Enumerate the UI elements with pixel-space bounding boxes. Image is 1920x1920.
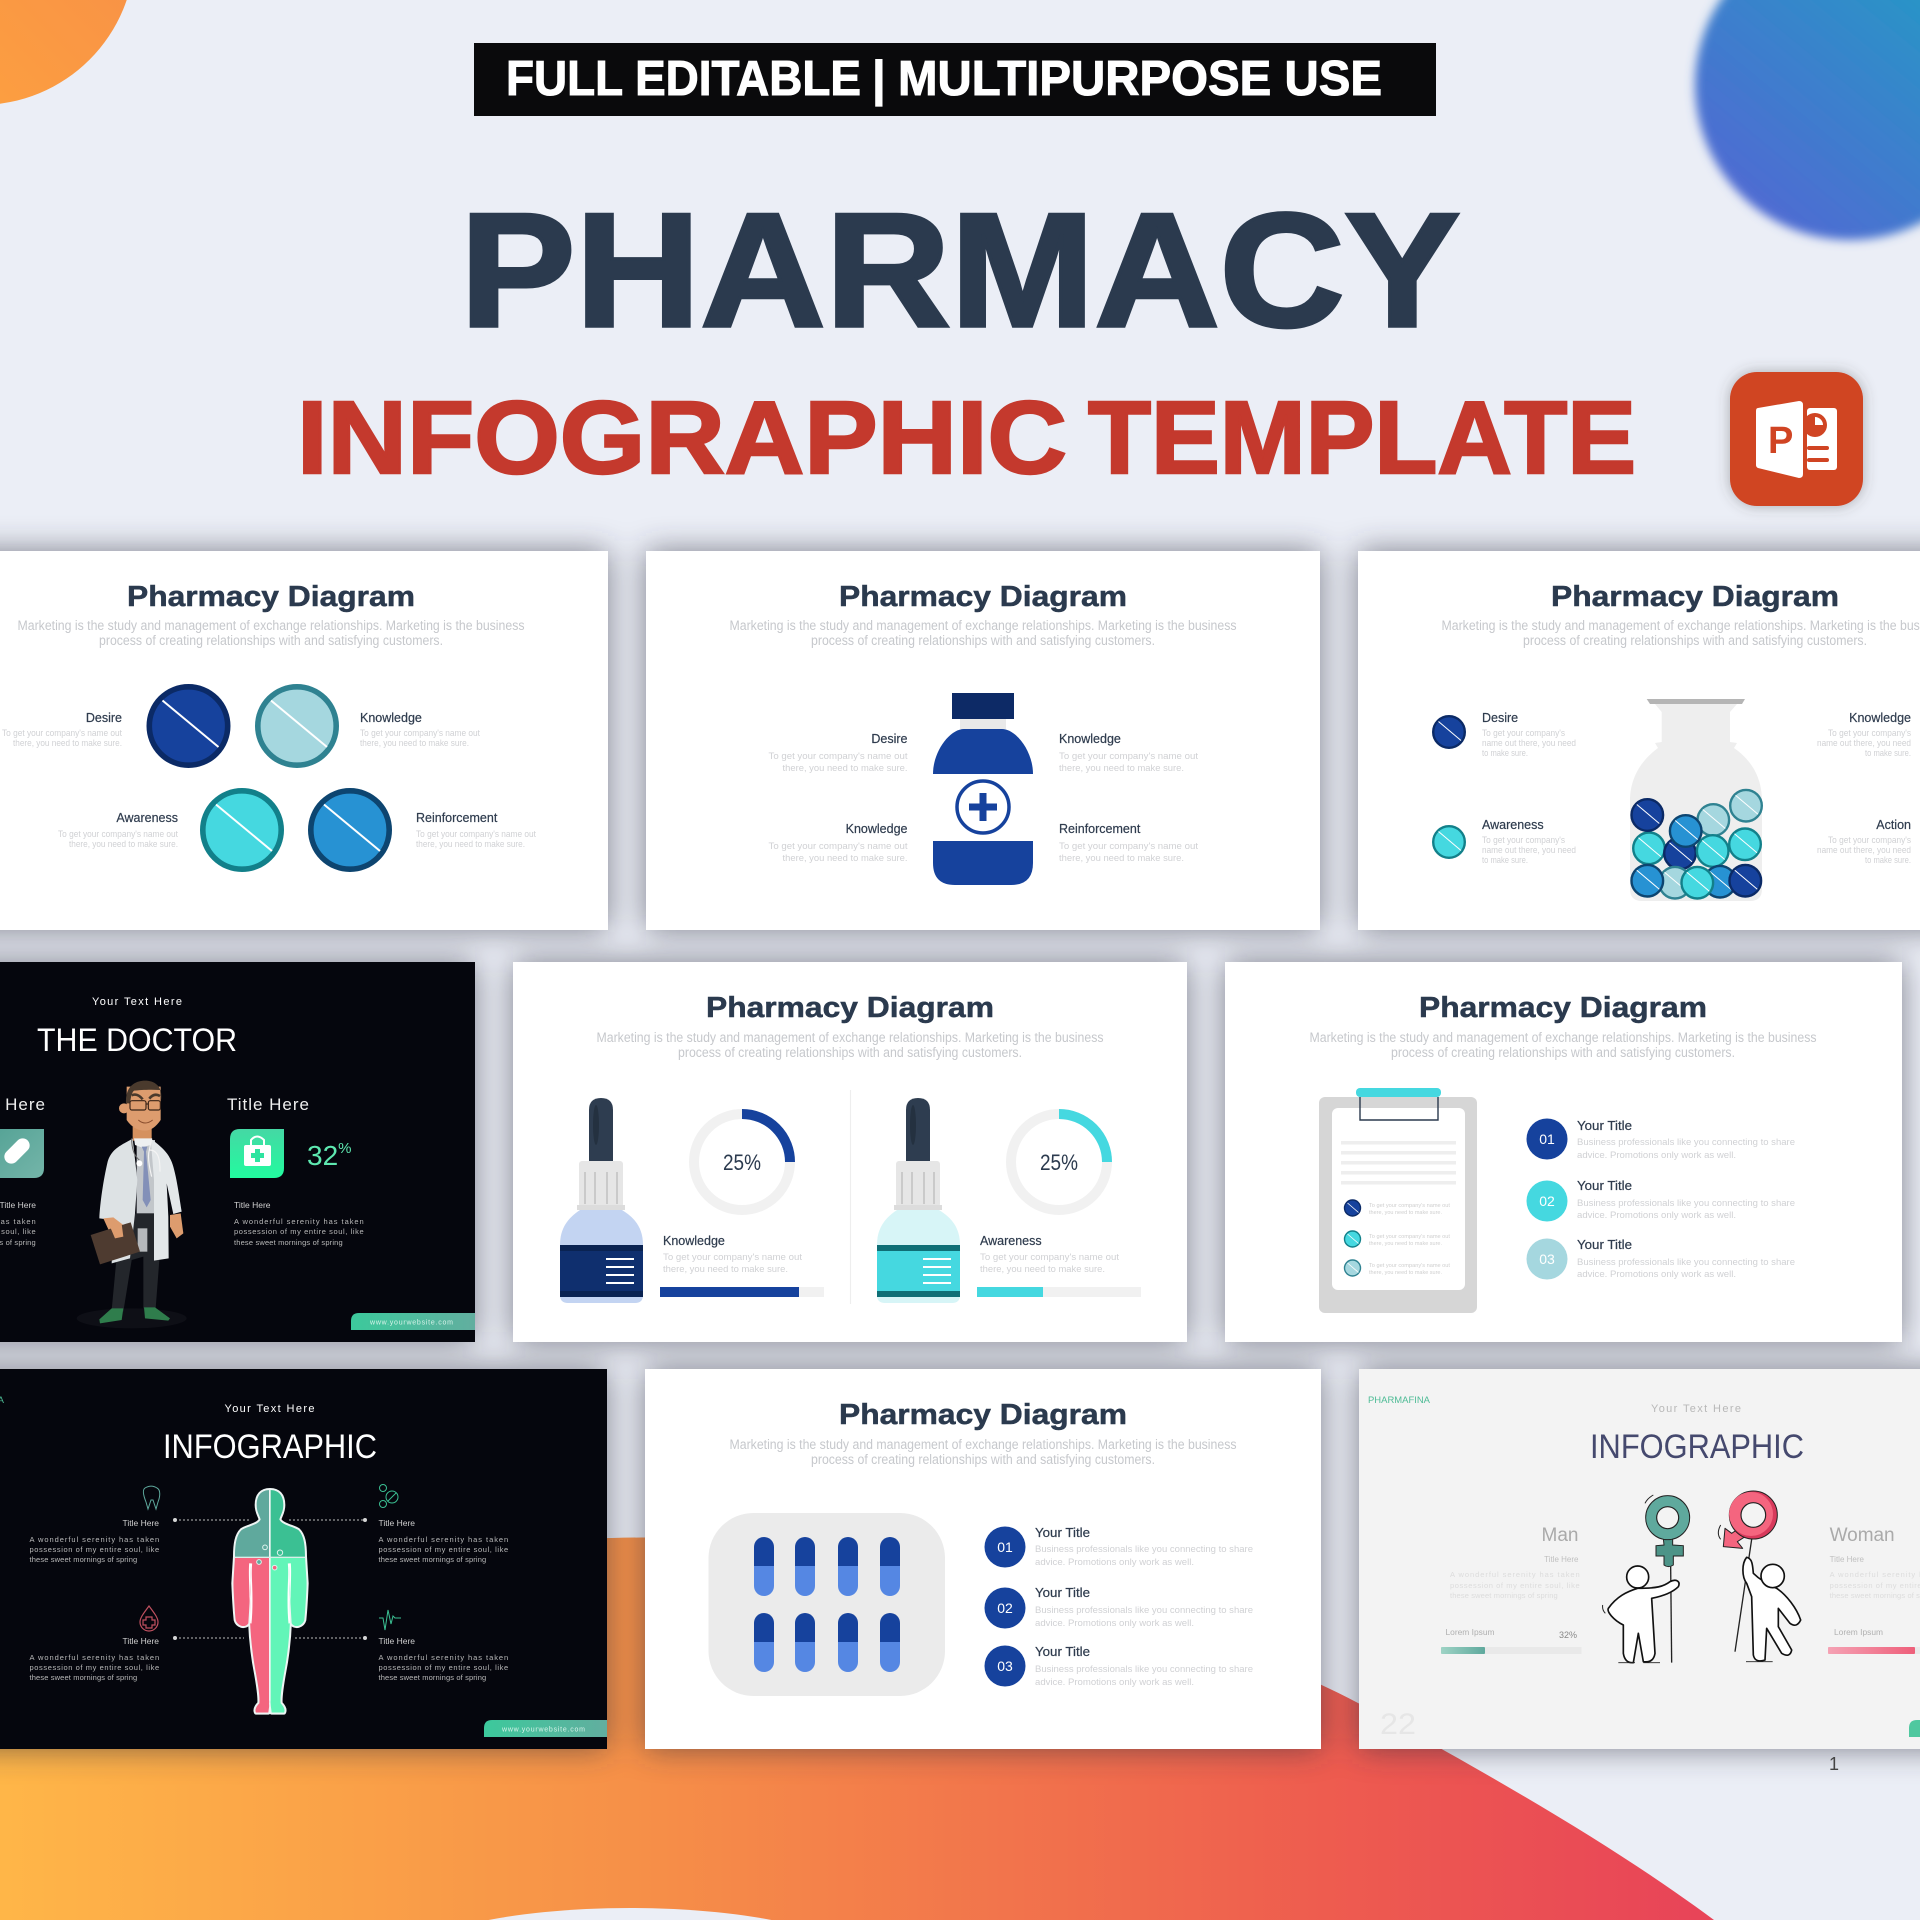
progress: Man 32% <box>1441 1628 1582 1654</box>
illustration: person holding male symbol <box>1718 1491 1801 1662</box>
icon: jar <box>1630 699 1762 901</box>
decorative blob: orange top left <box>0 0 135 105</box>
text block: Man: these sweet mornings of spring <box>1450 1591 1558 1600</box>
icon: clipboard <box>1319 1088 1477 1313</box>
text block: bottom left: A wonderful serenity has taken <box>30 1653 160 1662</box>
label: Knowledge <box>1817 711 1911 759</box>
label: Knowledge right: Knowledge <box>1059 732 1121 746</box>
heading: Pharmacy Diagram <box>1551 581 1839 613</box>
icon: blue dropper bottle <box>560 1098 643 1303</box>
list item 02: 02 <box>997 1600 1013 1616</box>
donut chart: 25% teal <box>1011 1114 1107 1210</box>
label: Awareness: Awareness <box>980 1234 1042 1248</box>
icon: clipboard: To get your company's name out <box>1369 1234 1450 1240</box>
label: Desire: To get your company's name out <box>2 728 122 739</box>
page number: 22: 22 <box>1380 1708 1416 1741</box>
intro text: process of creating relationships with and satisfying customers. <box>1523 633 1867 648</box>
list item 01 <box>1526 1118 1795 1161</box>
icon: pulse <box>379 1610 401 1630</box>
label: Knowledge: Knowledge <box>663 1234 725 1248</box>
label: Reinforcement: To get your company's name out <box>1059 841 1198 852</box>
text block: bottom left <box>30 1636 160 1682</box>
label: Knowledge left <box>768 822 908 864</box>
text block: Man: Title Here <box>1544 1555 1579 1564</box>
panel: man and woman <box>1359 1369 1920 1749</box>
label: Desire: To get your company's name out <box>768 751 908 762</box>
label: Awareness: Awareness <box>116 811 178 825</box>
panel: pill jar <box>1358 551 1920 930</box>
legend pill: Awareness <box>1433 826 1465 858</box>
list item 02: Business professionals like you connecting to share <box>1577 1198 1795 1209</box>
text block: Man <box>1450 1525 1580 1600</box>
label: Awareness: there, you need to make sure. <box>69 839 178 850</box>
top banner: FULL EDITABLE <box>506 52 861 106</box>
panel: clipboard <box>1225 962 1902 1342</box>
label: Desire: Desire <box>871 732 908 746</box>
text block: Woman: Woman <box>1830 1525 1895 1546</box>
icon: clipboard: there, you need to make sure. <box>1369 1210 1442 1216</box>
title: PHARMACY <box>460 180 1460 361</box>
intro text: Marketing is the study and management of exchange relationships. Marketing is the business <box>1310 1030 1817 1045</box>
subtitle: INFOGRAPHIC <box>297 380 1067 495</box>
small heading: Your Text Here <box>224 1403 314 1415</box>
icon: clipboard: there, you need to make sure. <box>1369 1270 1442 1276</box>
list item 03 <box>1526 1238 1795 1280</box>
list item 01: Business professionals like you connecting to share <box>1577 1137 1795 1148</box>
label: Knowledge right: To get your company's name out <box>1059 751 1198 762</box>
text block: bottom right <box>378 1636 508 1682</box>
illustration: person holding female symbol <box>1603 1495 1690 1663</box>
text block: top right: these sweet mornings of spring <box>378 1555 486 1564</box>
illustration: doctor <box>77 1081 187 1328</box>
donut chart: 25% <box>694 1114 790 1210</box>
label: Action: To get your company's <box>1828 835 1911 846</box>
label: Knowledge: Knowledge <box>1849 711 1911 725</box>
progress bar: Knowledge <box>660 1287 824 1297</box>
text block: top right: A wonderful serenity has taken <box>378 1535 508 1544</box>
list item 01: advice. Promotions only work as well. <box>1577 1150 1736 1161</box>
donut chart: 25%: 25% <box>723 1150 761 1175</box>
list item 02: 02 <box>1539 1193 1555 1209</box>
top banner <box>474 43 1436 116</box>
list item 01: Business professionals like you connecting to share <box>1035 1544 1253 1555</box>
brand text: PHARMAFINA <box>1368 1395 1431 1406</box>
panel: human body infographic <box>0 1369 607 1749</box>
intro text: Marketing is the study and management of exchange relationships. Marketing is the business <box>18 618 525 633</box>
subtitle <box>297 380 1636 495</box>
label: Reinforcement: there, you need to make sure. <box>416 839 525 850</box>
text block: bottom left: Title Here <box>122 1636 159 1646</box>
label: Knowledge: there, you need to make sure. <box>663 1264 788 1275</box>
list item 03 <box>984 1645 1253 1688</box>
page number: 1: 1 <box>1829 1754 1839 1774</box>
list item 01: advice. Promotions only work as well. <box>1035 1557 1194 1568</box>
list item 02 <box>984 1586 1253 1629</box>
progress: Woman <box>1828 1628 1920 1654</box>
decorative cutout: bottom centre curve <box>405 1908 855 1920</box>
pill: Knowledge <box>258 687 336 765</box>
right column text: Title Here <box>234 1200 271 1210</box>
donut chart: 25% teal: 25% <box>1040 1150 1078 1175</box>
list item 02: Business professionals like you connecting to share <box>1035 1605 1253 1616</box>
label: Knowledge <box>360 711 480 749</box>
label: Desire: To get your company's <box>1482 728 1565 739</box>
small heading: Your Text Here <box>92 996 182 1008</box>
list item 03: 03 <box>997 1658 1013 1674</box>
intro text: process of creating relationships with and satisfying customers. <box>811 1452 1155 1467</box>
subtitle: TEMPLATE <box>1088 380 1636 495</box>
heading: Pharmacy Diagram <box>839 581 1127 613</box>
list item 02: advice. Promotions only work as well. <box>1035 1618 1194 1629</box>
list item 01: Your Title <box>1035 1526 1090 1540</box>
label: Knowledge: To get your company's name out <box>360 728 480 739</box>
intro text: Marketing is the study and management of exchange relationships. Marketing is the business <box>730 618 1237 633</box>
label: Desire: Desire <box>1482 711 1518 725</box>
intro text: process of creating relationships with and satisfying customers. <box>811 633 1155 648</box>
heading: THE DOCTOR <box>37 1022 237 1058</box>
label: Desire <box>1482 711 1576 759</box>
label: Knowledge left: To get your company's name out <box>768 841 908 852</box>
website tab <box>1909 1720 1920 1737</box>
legend pill: Desire <box>1433 716 1465 748</box>
label: Awareness: there, you need to make sure. <box>980 1264 1105 1275</box>
label: Knowledge: Knowledge <box>360 711 422 725</box>
label: Reinforcement <box>416 811 536 850</box>
list item 03: Business professionals like you connecting to share <box>1577 1257 1795 1268</box>
label: Awareness: To get your company's name out <box>980 1252 1119 1263</box>
label: Desire <box>2 711 122 749</box>
left column text <box>0 1200 36 1247</box>
small heading: Your Text Here <box>1651 1403 1741 1415</box>
label: Reinforcement: To get your company's name out <box>416 829 536 840</box>
label: Knowledge <box>663 1234 802 1275</box>
list item 03: advice. Promotions only work as well. <box>1577 1269 1736 1280</box>
heading: Pharmacy Diagram <box>127 581 415 613</box>
text block: Woman: Title Here <box>1830 1555 1865 1564</box>
label: Desire: Desire <box>86 711 122 725</box>
icon: PowerPoint <box>1730 372 1863 506</box>
list item 03: Your Title <box>1577 1238 1632 1252</box>
list item 01: 01 <box>997 1539 1013 1555</box>
list item 02: Your Title <box>1035 1586 1090 1600</box>
text block: bottom right: these sweet mornings of spring <box>378 1673 486 1682</box>
label: Reinforcement <box>1059 822 1198 864</box>
icon: clipboard: To get your company's name out <box>1369 1263 1450 1269</box>
right column title: Title Here <box>227 1095 309 1114</box>
stat: 32%: 32 <box>307 1140 338 1171</box>
heading: Pharmacy Diagram <box>1419 992 1707 1024</box>
text block: bottom left: these sweet mornings of spring <box>30 1673 138 1682</box>
right column text: possession of my entire soul, like <box>234 1227 364 1236</box>
right column text: these sweet mornings of spring <box>234 1238 343 1247</box>
text block: top right <box>378 1518 508 1564</box>
label: Knowledge left: there, you need to make sure. <box>782 853 908 864</box>
label: Reinforcement: there, you need to make sure. <box>1059 853 1184 864</box>
label: Knowledge left: Knowledge <box>846 822 908 836</box>
intro text: Marketing is the study and management of exchange relationships. Marketing is the business <box>730 1437 1237 1452</box>
heading: INFOGRAPHIC <box>1590 1428 1804 1466</box>
intro text: process of creating relationships with and satisfying customers. <box>1391 1045 1735 1060</box>
website tab: www.yourwebsite.com <box>369 1320 453 1326</box>
label: Desire: there, you need to make sure. <box>13 738 122 749</box>
icon: tooth <box>143 1486 160 1509</box>
decorative wave: orange to red bottom <box>0 1538 1714 1920</box>
label: Knowledge: To get your company's name out <box>663 1252 802 1263</box>
icon: teal dropper bottle <box>877 1098 960 1303</box>
text block: Man: possession of my entire soul, like <box>1450 1581 1580 1590</box>
progress: Man 32%: 32% <box>1559 1630 1577 1640</box>
text block: bottom right: A wonderful serenity has taken <box>378 1653 508 1662</box>
label: Action: Action <box>1876 818 1911 832</box>
progress bar: Awareness <box>977 1287 1141 1297</box>
heading: INFOGRAPHIC <box>163 1428 377 1466</box>
icon: bottle <box>933 693 1033 885</box>
label: Action <box>1817 818 1911 866</box>
stat: 32%: % <box>338 1140 352 1157</box>
label: Desire: to make sure. <box>1482 748 1528 759</box>
text block: bottom right: possession of my entire soul, like <box>378 1663 508 1672</box>
intro text: process of creating relationships with and satisfying customers. <box>678 1045 1022 1060</box>
pill: Awareness <box>203 791 281 869</box>
progress: Man 32%: Lorem Ipsum <box>1446 1628 1495 1637</box>
panel: the doctor <box>0 962 475 1342</box>
top banner: | <box>872 52 886 106</box>
intro text <box>730 618 1237 648</box>
text block: top left: these sweet mornings of spring <box>30 1555 138 1564</box>
text block: bottom left: possession of my entire soul, like <box>30 1663 160 1672</box>
text block: top left: possession of my entire soul, like <box>30 1545 160 1554</box>
icon: clipboard: there, you need to make sure. <box>1369 1241 1442 1247</box>
list item 01 <box>984 1526 1253 1568</box>
panel: four pills <box>0 551 608 930</box>
website tab <box>351 1313 475 1330</box>
panel: blister pack <box>645 1369 1321 1749</box>
label: Reinforcement: Reinforcement <box>1059 822 1141 836</box>
text block: top right: Title Here <box>378 1518 415 1528</box>
label: Knowledge: To get your company's <box>1828 728 1911 739</box>
illustration: body <box>230 1487 310 1717</box>
label: Awareness: to make sure. <box>1482 855 1528 866</box>
text block: top left: A wonderful serenity has taken <box>30 1535 160 1544</box>
text block: Man: Man <box>1542 1525 1578 1546</box>
list item 03: Your Title <box>1035 1645 1090 1659</box>
label: Awareness <box>980 1234 1119 1275</box>
icon: blister pack <box>708 1513 945 1696</box>
label: Reinforcement: Reinforcement <box>416 811 498 825</box>
text block: Woman <box>1830 1525 1920 1600</box>
icon: pills <box>380 1484 398 1508</box>
list item 02: Your Title <box>1577 1179 1632 1193</box>
label: Knowledge: there, you need to make sure. <box>360 738 469 749</box>
label: Desire <box>768 732 908 774</box>
list item 01: Your Title <box>1577 1119 1632 1133</box>
icon: capsule tile <box>0 1129 44 1178</box>
pills inside jar <box>1632 790 1762 898</box>
label: Desire: there, you need to make sure. <box>782 763 908 774</box>
label: Desire: name out there, you need <box>1482 738 1576 749</box>
label: Awareness: Awareness <box>1482 818 1544 832</box>
intro text <box>18 618 525 648</box>
top banner: MULTIPURPOSE USE <box>898 52 1382 106</box>
list item 02 <box>1526 1179 1795 1222</box>
text block: top left <box>30 1518 160 1564</box>
label: Awareness: To get your company's name out <box>58 829 178 840</box>
text block: bottom right: Title Here <box>378 1636 415 1646</box>
icon: PowerPoint: P <box>1768 420 1793 462</box>
list item 03: Business professionals like you connecting to share <box>1035 1664 1253 1675</box>
panel: dropper bottles <box>513 962 1187 1342</box>
list item 02: advice. Promotions only work as well. <box>1577 1210 1736 1221</box>
label: Awareness <box>1482 818 1576 866</box>
intro text: Marketing is the study and management of exchange relationships. Marketing is the business <box>596 1030 1104 1045</box>
label: Knowledge right: there, you need to make sure. <box>1059 763 1184 774</box>
left column text: Title Here <box>0 1200 36 1210</box>
intro text <box>1310 1030 1817 1060</box>
pill: Reinforcement <box>311 791 389 869</box>
label: Awareness <box>58 811 178 850</box>
text block: Man: A wonderful serenity has taken <box>1450 1570 1580 1579</box>
decorative blob: blue top right <box>1695 0 1920 240</box>
intro text <box>1442 618 1920 648</box>
list item 03: 03 <box>1539 1251 1555 1267</box>
panel: medicine bottle <box>646 551 1320 930</box>
icon: blood drop <box>140 1606 158 1631</box>
icon: first aid kit tile <box>230 1129 284 1178</box>
label: Knowledge right <box>1059 732 1198 774</box>
list item 03: advice. Promotions only work as well. <box>1035 1677 1194 1688</box>
intro text <box>730 1437 1237 1467</box>
website tab <box>484 1720 607 1737</box>
website tab: www.yourwebsite.com <box>501 1726 585 1734</box>
text block: top right: possession of my entire soul, like <box>378 1545 508 1554</box>
label: Awareness: name out there, you need <box>1482 845 1576 856</box>
right column text: A wonderful serenity has taken <box>234 1217 364 1226</box>
intro text: process of creating relationships with and satisfying customers. <box>99 633 443 648</box>
heading: Pharmacy Diagram <box>706 992 994 1024</box>
connector lines <box>173 1518 367 1640</box>
right column text <box>234 1200 364 1247</box>
icon: clipboard: To get your company's name out <box>1369 1203 1450 1209</box>
progress: Woman: Lorem Ipsum <box>1834 1628 1883 1637</box>
pill: Desire <box>149 687 228 765</box>
heading: Pharmacy Diagram <box>839 1399 1127 1431</box>
list item 01: 01 <box>1539 1131 1555 1147</box>
text block: top left: Title Here <box>122 1518 159 1528</box>
label: Awareness: To get your company's <box>1482 835 1565 846</box>
intro text <box>596 1030 1104 1060</box>
